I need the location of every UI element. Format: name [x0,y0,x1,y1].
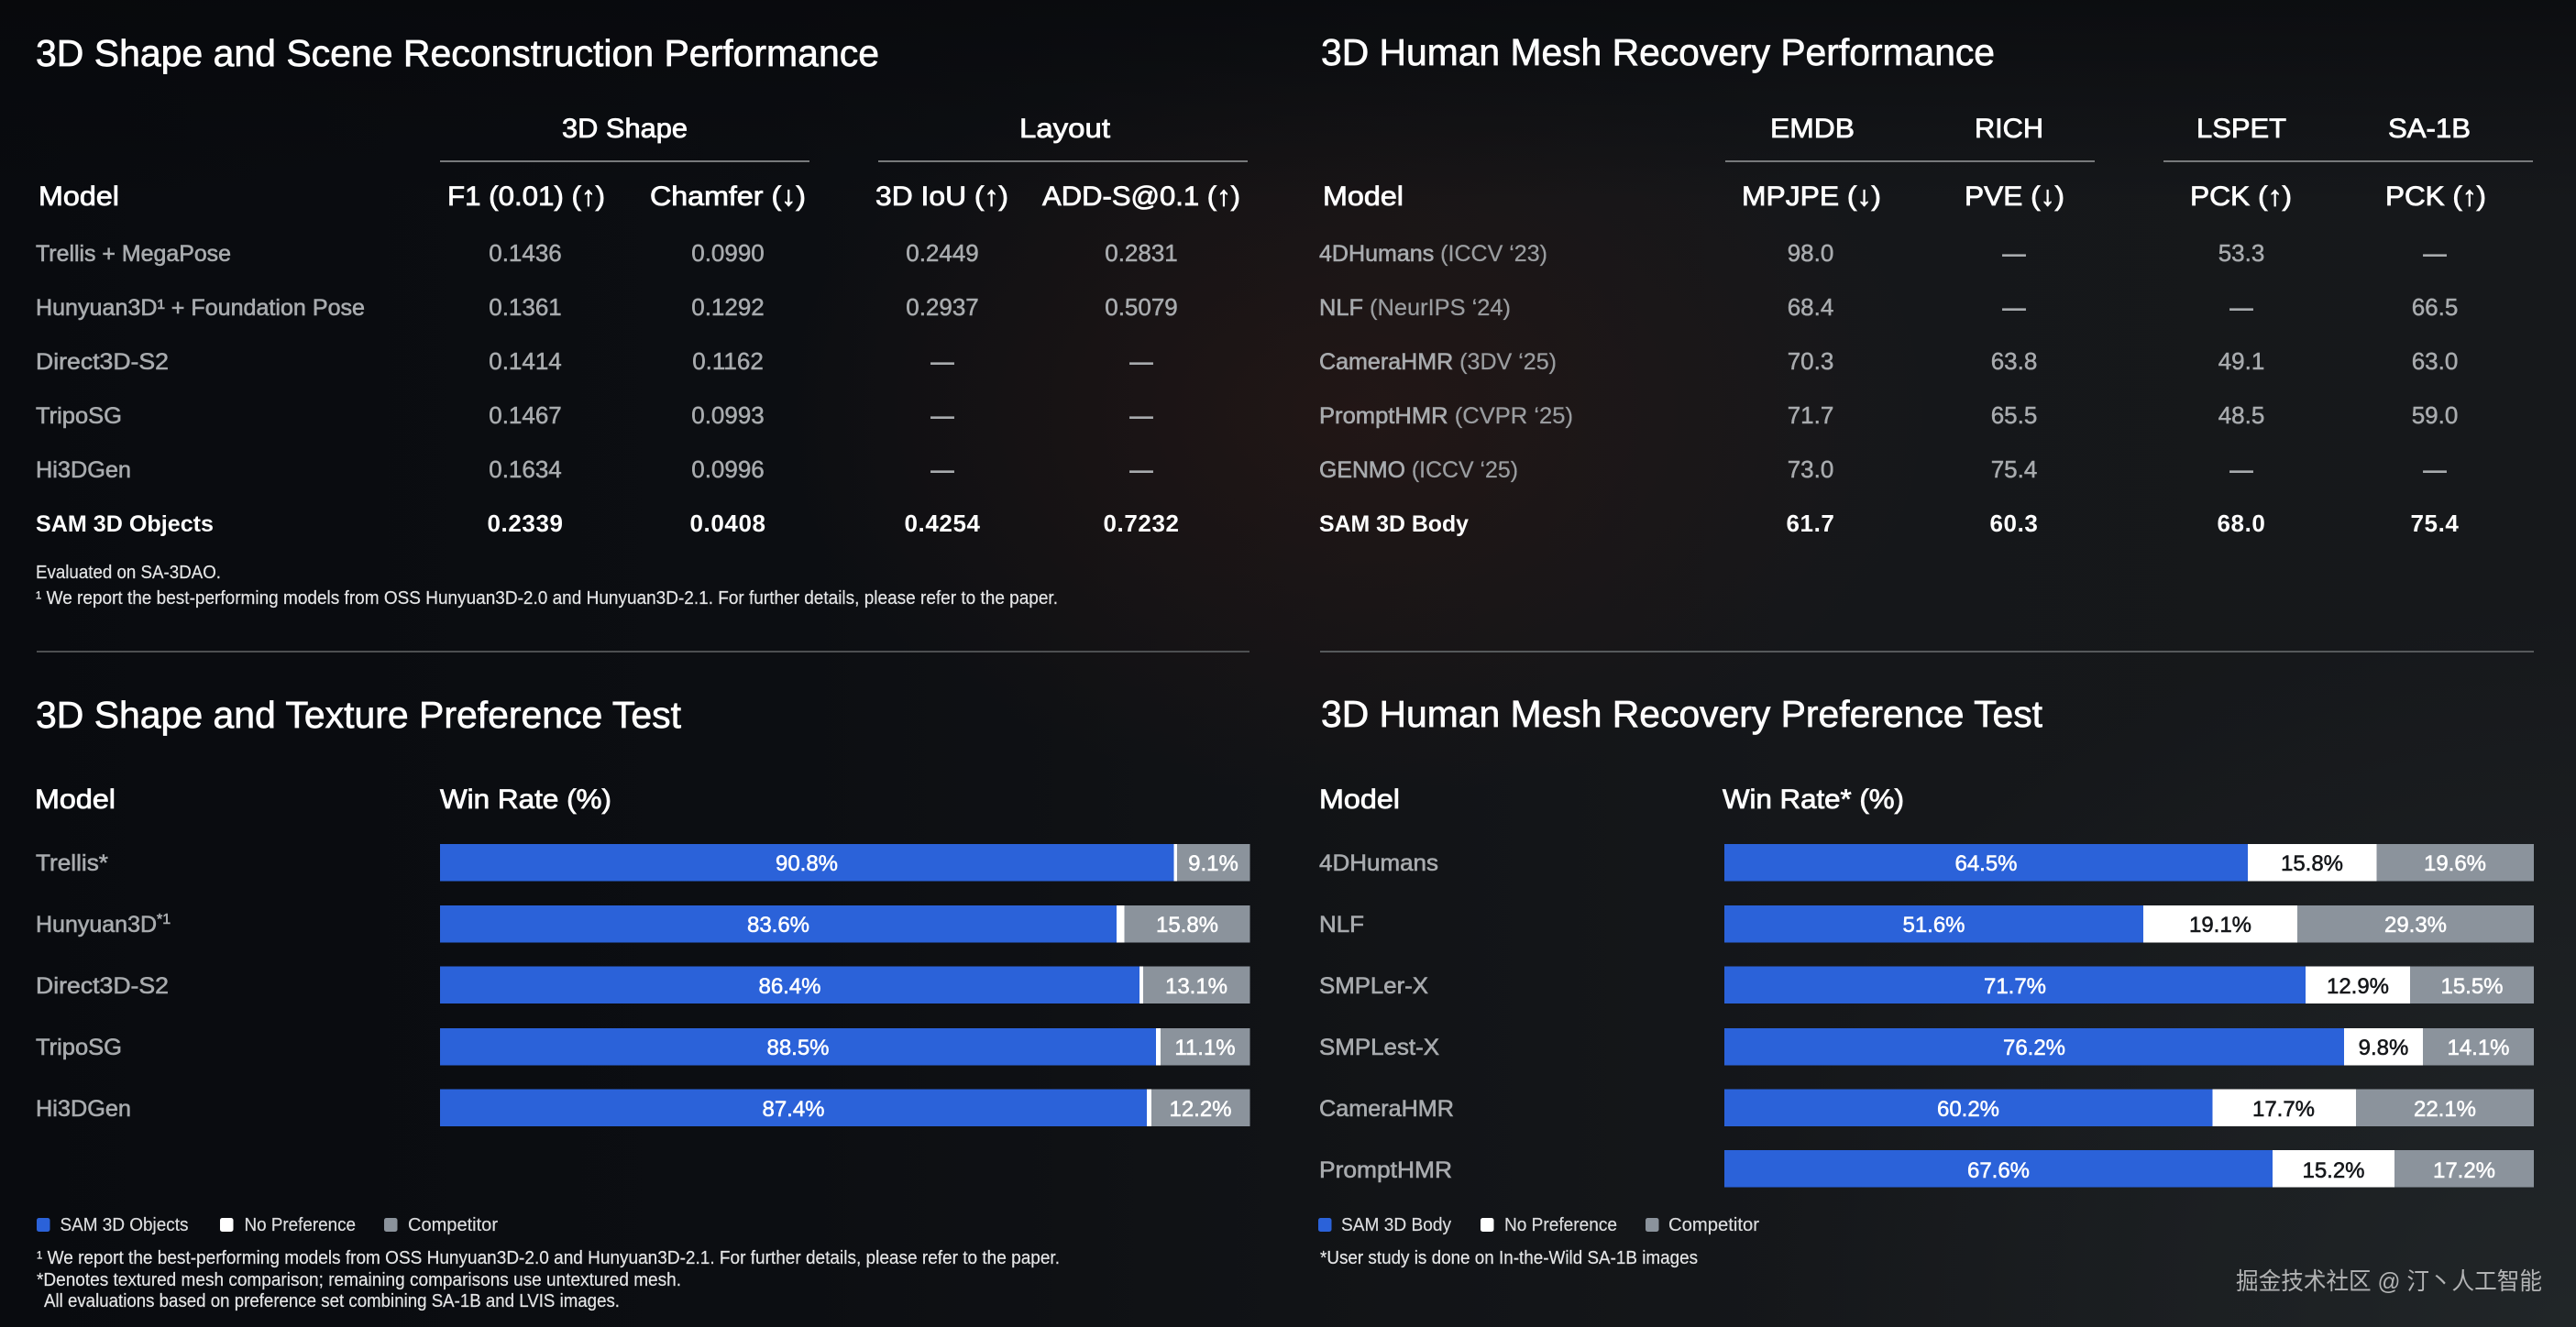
bar row: CameraHMR: 60.2% [1937,1097,1999,1122]
row: Direct3D-S2: Direct3D-S2 [36,349,169,375]
panel: 3D shape and texture preference test [35,694,1250,1311]
row: PromptHMR: PromptHMR (CVPR ‘25) [1319,403,1573,429]
row: TripoSG: — [931,403,953,429]
row: SAM 3D Objects: 0.2339 [487,510,564,537]
row: Hunyuan3D + Foundation Pose: 0.5079 [1105,293,1178,321]
row: PromptHMR: 71.7 [1788,401,1833,429]
bar row: Direct3D-S2 [36,966,1250,1003]
row: Hi3DGen: — [931,457,953,483]
group header: Layout: Layout [1019,114,1111,144]
row: GENMO: — [2229,457,2253,483]
row: SAM 3D Objects: 0.4254 [904,510,981,537]
row: PromptHMR: 48.5 [2218,401,2264,429]
heading: mesh recovery performance: 3D Human Mesh Recovery Performance [1321,31,1995,73]
panel: 3D human mesh recovery preference test [1318,693,2534,1268]
row: 4DHumans: 53.3 [2218,239,2264,267]
row: SAM 3D Body: 68.0 [2217,510,2266,537]
row: Hunyuan3D + Foundation Pose: 0.1292 [691,293,765,321]
row: PromptHMR: 59.0 [2412,401,2458,429]
footnote: Evaluated on SA-3DAO. [36,563,221,583]
legend: SAM 3D Body [1341,1215,1451,1235]
bar row: 4DHumans [1319,844,2534,882]
bar row: 4DHumans: 19.6% [2424,851,2486,876]
row: Hi3DGen: 0.1634 [489,455,562,483]
row: SAM 3D Objects: SAM 3D Objects [36,511,214,537]
bar row: CameraHMR: 22.1% [2414,1097,2476,1122]
row: TripoSG: TripoSG [36,403,122,429]
row: CameraHMR: 63.8 [1991,347,2037,375]
row: TripoSG: 0.0993 [691,401,765,429]
row: Trellis + MegaPose: 0.0990 [691,239,765,267]
bar row: SMPLer-X: 12.9% [2327,974,2389,999]
row: PromptHMR [1319,401,2458,429]
row: Direct3D-S2: 0.1162 [692,347,764,375]
footnote: ¹ We report the best-performing models from OSS Hunyuan3D-2.0 and Hunyuan3D-2.1. For further details, please refer to the paper. [36,588,1058,609]
row: SAM 3D Body [1319,510,2460,537]
row: 4DHumans [1319,239,2446,267]
footnotes [37,1248,1060,1311]
row: SAM 3D Objects [36,510,1180,537]
column headers: PCK (↑) [2385,181,2486,212]
row: NLF: NLF (NeurIPS ‘24) [1319,295,1511,321]
row: 4DHumans: — [2424,241,2446,267]
bar row: Direct3D-S2: Direct3D-S2 [36,973,169,999]
column headers: Model [35,784,116,815]
legend [37,1215,498,1235]
row: TripoSG [36,401,1153,429]
watermark: 掘金技术社区 @ 汀丶人工智能 [2236,1267,2542,1295]
heading: mesh recovery preference: 3D Human Mesh Recovery Preference Test [1321,693,2043,735]
row: GENMO: 73.0 [1788,455,1833,483]
bar row: TripoSG: TripoSG [36,1035,122,1060]
bar row: SMPLest-X [1319,1028,2534,1065]
row: Hi3DGen [36,455,1153,483]
row: SAM 3D Body: 60.3 [1989,510,2039,537]
row: SAM 3D Body: SAM 3D Body [1319,511,1469,537]
bar row: CameraHMR: 17.7% [2252,1097,2315,1122]
footnote: *User study is done on In-the-Wild SA-1B images [1320,1248,1698,1268]
bar row: PromptHMR: 67.6% [1967,1158,2030,1183]
bar row: Trellis: 90.8% [776,851,838,876]
bar row: Hunyuan3D [36,905,1250,942]
column headers: Model [1319,784,1400,815]
bar row: TripoSG: 11.1% [1174,1036,1236,1060]
row: NLF [1319,293,2458,321]
bar row: NLF [1319,905,2534,942]
row: SAM 3D Objects: 0.0408 [689,510,766,537]
column headers: Model [1323,181,1404,212]
legend: SAM 3D Objects [61,1215,189,1235]
row: GENMO: 75.4 [1991,455,2037,483]
bar row: Hi3DGen: Hi3DGen [36,1096,131,1122]
row: Hunyuan3D + Foundation Pose: 0.1361 [489,293,562,321]
column headers [1319,784,1904,815]
group headers: EMDB, RICH: RICH [1975,114,2043,144]
heading: shape and texture preference: 3D Shape and Texture Preference Test [36,694,682,736]
row: SAM 3D Objects: 0.7232 [1103,510,1180,537]
footnotes: ¹ We report the best-performing models from OSS Hunyuan3D-2.0 and Hunyuan3D-2.1. For further details, please refer to the paper. [37,1248,1060,1268]
bar row: NLF: 19.1% [2189,913,2251,938]
bar row: Hunyuan3D: 83.6% [747,913,809,938]
row: NLF: 68.4 [1788,293,1833,321]
column headers: Chamfer (↓) [650,181,806,212]
row: NLF: 66.5 [2412,293,2458,321]
row: Trellis + MegaPose: Trellis + MegaPose [36,241,231,267]
bar row: SMPLer-X: 71.7% [1984,974,2046,999]
row: Trellis + MegaPose: 0.2449 [906,239,979,267]
bar row: 4DHumans: 64.5% [1954,851,2018,876]
row: GENMO: GENMO (ICCV ‘25) [1319,457,1518,483]
bar row: SMPLest-X: SMPLest-X [1319,1035,1439,1060]
footnote [36,563,1058,609]
row: 4DHumans: 4DHumans (ICCV ‘23) [1319,241,1547,267]
row: Direct3D-S2: 0.1414 [489,347,562,375]
row: TripoSG: 0.1467 [489,401,562,429]
row: CameraHMR: 49.1 [2218,347,2264,375]
row: CameraHMR: 63.0 [2412,347,2458,375]
column headers: MPJPE (↓) [1742,181,1881,212]
bar row: SMPLest-X: 14.1% [2447,1036,2510,1060]
column headers: PVE (↓) [1965,181,2064,212]
bar row: Trellis: 9.1% [1188,851,1238,876]
bar row: 4DHumans: 15.8% [2281,851,2343,876]
row: Trellis + MegaPose: 0.1436 [489,239,562,267]
column headers: F1 (0.01) (↑) [447,181,605,212]
row: CameraHMR: CameraHMR (3DV ‘25) [1319,349,1557,375]
group headers: EMDB, RICH [1725,114,2095,162]
legend: No Preference [244,1215,356,1235]
bar row: CameraHMR [1319,1089,2534,1126]
bar row: Direct3D-S2: 13.1% [1165,974,1227,999]
bar row: SMPLer-X [1319,966,2534,1003]
row: Hunyuan3D + Foundation Pose: Hunyuan3D¹ + Foundation Pose [36,295,365,321]
bar row: PromptHMR: 15.2% [2302,1158,2365,1183]
row: GENMO [1319,455,2446,483]
bar row: SMPLer-X: SMPLer-X [1319,973,1428,999]
heading: reconstruction performance: 3D Shape and Scene Reconstruction Performance [36,32,879,74]
row: Hi3DGen: Hi3DGen [36,457,131,483]
bar row: SMPLest-X: 76.2% [2003,1036,2065,1060]
row: CameraHMR [1319,347,2458,375]
column headers: PCK (↑) [2190,181,2292,212]
footnotes: All evaluations based on preference set combining SA-1B and LVIS images. [44,1291,620,1311]
row: NLF: — [2229,295,2253,321]
row: PromptHMR: 65.5 [1991,401,2037,429]
bar row: Hi3DGen: 87.4% [762,1097,825,1122]
row: 4DHumans: — [2002,241,2026,267]
group headers: EMDB, RICH: EMDB [1770,114,1855,144]
bar row: CameraHMR: CameraHMR [1319,1096,1454,1122]
group headers: LSPET, SA-1B: LSPET [2196,114,2286,144]
bar row: TripoSG [36,1028,1250,1065]
legend [1318,1215,1759,1235]
row: Direct3D-S2: — [931,349,953,375]
row: GENMO: — [2424,457,2446,483]
bar row: Trellis: Trellis* [36,850,108,876]
column headers: 3D IoU (↑) [875,181,1008,212]
row: Hi3DGen: 0.0996 [691,455,765,483]
footnotes: *Denotes textured mesh comparison; remaining comparisons use untextured mesh. [37,1270,681,1290]
bar row: TripoSG: 88.5% [766,1036,830,1060]
bar row: PromptHMR: 17.2% [2433,1158,2495,1183]
row: Trellis + MegaPose: 0.2831 [1105,239,1178,267]
legend: Competitor [1668,1215,1759,1235]
group headers: LSPET, SA-1B: SA-1B [2388,114,2471,144]
bar row: NLF: NLF [1319,912,1364,938]
column headers [1323,181,2486,212]
bar row: Hunyuan3D: Hunyuan3D [36,912,157,938]
bar row: PromptHMR: PromptHMR [1319,1157,1452,1183]
row: TripoSG: — [1129,403,1153,429]
row: Hi3DGen: — [1129,457,1153,483]
bar row: Trellis [36,844,1250,882]
row: Hunyuan3D + Foundation Pose: 0.2937 [906,293,979,321]
bar row: SMPLer-X: 15.5% [2440,974,2504,999]
row: Direct3D-S2 [36,347,1153,375]
bar row: PromptHMR [1319,1150,2534,1188]
column headers: Win Rate (%) [440,784,611,815]
panel: 3D human mesh recovery table [1319,31,2533,537]
bar row: Hunyuan3D: 15.8% [1156,913,1218,938]
panel: 3D shape and scene reconstruction table [36,32,1248,609]
group header: 3D Shape: 3D Shape [562,114,688,144]
bar row: Hi3DGen: 12.2% [1169,1097,1232,1122]
legend: No Preference [1504,1215,1617,1235]
row: Direct3D-S2: — [1129,349,1153,375]
row: Trellis + MegaPose [36,239,1178,267]
bar row: Hi3DGen [36,1089,1250,1126]
row: SAM 3D Body: 61.7 [1786,510,1835,537]
row: Hunyuan3D + Foundation Pose [36,293,1178,321]
row: 4DHumans: 98.0 [1788,239,1833,267]
column headers: Win Rate* (%) [1723,784,1904,815]
row: NLF: — [2002,295,2026,321]
row: SAM 3D Body: 75.4 [2410,510,2460,537]
column headers [39,181,1240,212]
column headers: Model [39,181,119,212]
bar row: SMPLest-X: 9.8% [2359,1036,2408,1060]
column headers [35,784,611,815]
bar row: Hunyuan3D: *1 [157,912,171,927]
bar row: NLF: 51.6% [1902,913,1965,938]
row: CameraHMR: 70.3 [1788,347,1833,375]
bar row: NLF: 29.3% [2384,913,2447,938]
group headers: LSPET, SA-1B [2163,114,2533,162]
legend: Competitor [408,1215,498,1235]
bar row: Direct3D-S2: 86.4% [758,974,821,999]
bar row: 4DHumans: 4DHumans [1319,850,1438,876]
column headers: ADD-S@0.1 (↑) [1042,181,1240,212]
